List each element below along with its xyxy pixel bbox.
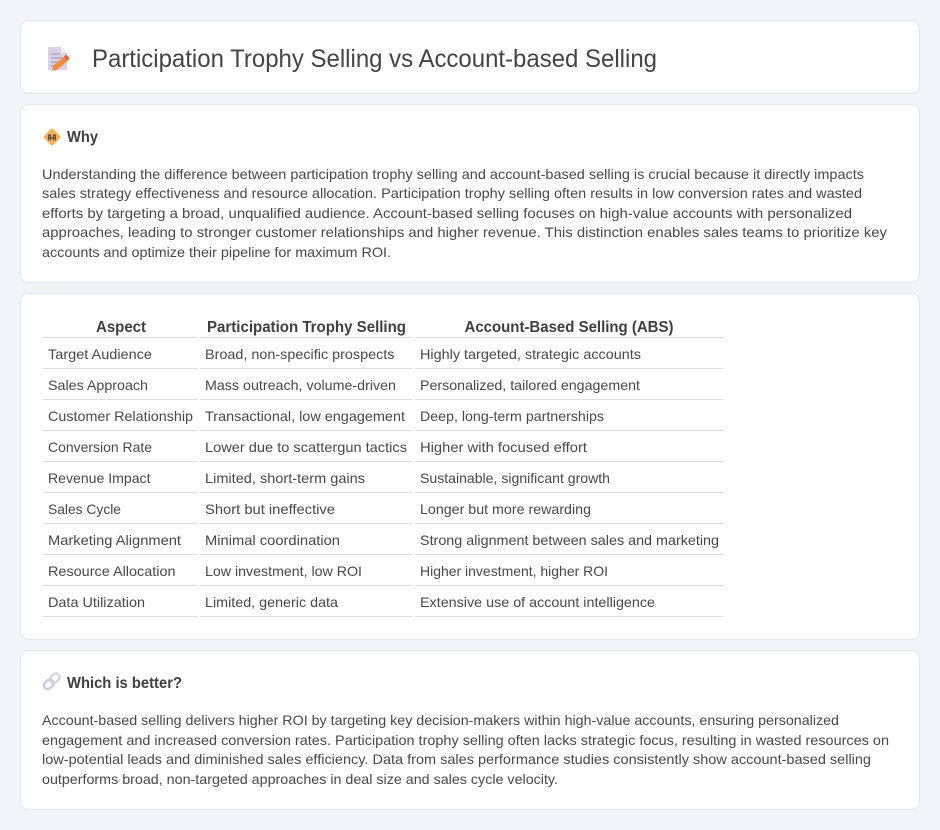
which is better text block: engagement and increased conversion rates. Participation trophy selling often lacks strategic focus, resulting in wasted resources on — [42, 732, 889, 748]
row: marketing alignment: Marketing Alignment — [48, 532, 181, 548]
row: revenue impact — [48, 470, 610, 486]
which is better heading: Which is better? — [67, 675, 182, 692]
why text block: accounts and optimize their pipeline for maximum ROI. — [42, 244, 391, 260]
row: target audience: Broad, non-specific prospects — [205, 346, 394, 362]
why text block: approaches, leading to stronger customer relationships and higher revenue. This distinction enables sales teams to prioritize key — [42, 224, 887, 240]
panel: title — [20, 20, 920, 94]
panel: which is better — [20, 650, 920, 810]
why heading: Why — [67, 129, 98, 146]
row: conversion rate: Conversion Rate — [48, 439, 152, 455]
row: resource allocation: Resource Allocation — [48, 563, 176, 579]
row: sales approach: Sales Approach — [48, 377, 148, 393]
row: target audience: Target Audience — [48, 346, 152, 362]
row: target audience: Highly targeted, strategic accounts — [420, 346, 641, 362]
which is better text block — [42, 712, 889, 787]
icon: diamond road sign — [43, 128, 61, 146]
which is better text block: low-potential leads and diminished sales efficiency. Data from sales performance studies consistently show account-based selling — [42, 751, 871, 767]
row: data utilization — [48, 594, 655, 610]
row: customer relationship: Transactional, low engagement — [205, 408, 405, 424]
row: sales approach: Personalized, tailored engagement — [420, 377, 640, 393]
row: conversion rate: Higher with focused effort — [420, 439, 587, 455]
table header row: Aspect — [96, 319, 146, 336]
why text block: Understanding the difference between participation trophy selling and account-based selling is crucial because it directly impacts — [42, 166, 864, 182]
row: sales cycle: Longer but more rewarding — [420, 501, 591, 517]
row: data utilization: Limited, generic data — [205, 594, 338, 610]
table header row — [96, 319, 674, 336]
why text block — [42, 166, 887, 260]
row: sales approach: Mass outreach, volume-driven — [205, 377, 396, 393]
row: resource allocation — [48, 563, 608, 579]
row: sales approach — [48, 377, 640, 393]
row: sales cycle: Short but ineffective — [205, 501, 335, 517]
table grid lines — [43, 338, 724, 616]
row: conversion rate: Lower due to scattergun tactics — [205, 439, 407, 455]
panel: why — [20, 104, 920, 282]
row: marketing alignment: Strong alignment between sales and marketing — [420, 532, 719, 548]
which is better text block: Account-based selling delivers higher ROI by targeting key decision-makers within high-value accounts, ensuring personalized — [42, 712, 839, 728]
row: resource allocation: Low investment, low ROI — [205, 563, 362, 579]
why text block: efforts by targeting a broad, unqualified audience. Account-based selling focuses on high-value accounts with personalized — [42, 205, 852, 221]
row: customer relationship — [48, 408, 604, 424]
icon: document with pencil — [48, 47, 70, 71]
panel: comparison table — [20, 294, 920, 640]
row: revenue impact: Limited, short-term gains — [205, 470, 365, 486]
row: sales cycle — [48, 501, 591, 517]
row: revenue impact: Revenue Impact — [48, 470, 151, 486]
which is better text block: outperforms broad, non-targeted approaches in deal size and sales cycle velocity. — [42, 771, 558, 787]
table header row: Participation Trophy Selling — [207, 319, 406, 336]
row: conversion rate — [48, 439, 587, 455]
row: data utilization: Extensive use of account intelligence — [420, 594, 655, 610]
row: customer relationship: Deep, long-term partnerships — [420, 408, 604, 424]
row: customer relationship: Customer Relationship — [48, 408, 193, 424]
why text block: sales strategy effectiveness and resource allocation. Participation trophy selling often results in low conversion rates and wasted — [42, 185, 862, 201]
row: target audience — [48, 346, 641, 362]
row: marketing alignment: Minimal coordination — [205, 532, 340, 548]
row: data utilization: Data Utilization — [48, 594, 145, 610]
row: resource allocation: Higher investment, higher ROI — [420, 563, 608, 579]
icon: chain link — [42, 672, 61, 691]
row: marketing alignment — [48, 532, 719, 548]
title heading: Participation Trophy Selling vs Account-based Selling — [92, 45, 657, 73]
row: sales cycle: Sales Cycle — [48, 501, 121, 517]
table header row: Account-Based Selling (ABS) — [464, 319, 674, 336]
row: revenue impact: Sustainable, significant growth — [420, 470, 610, 486]
